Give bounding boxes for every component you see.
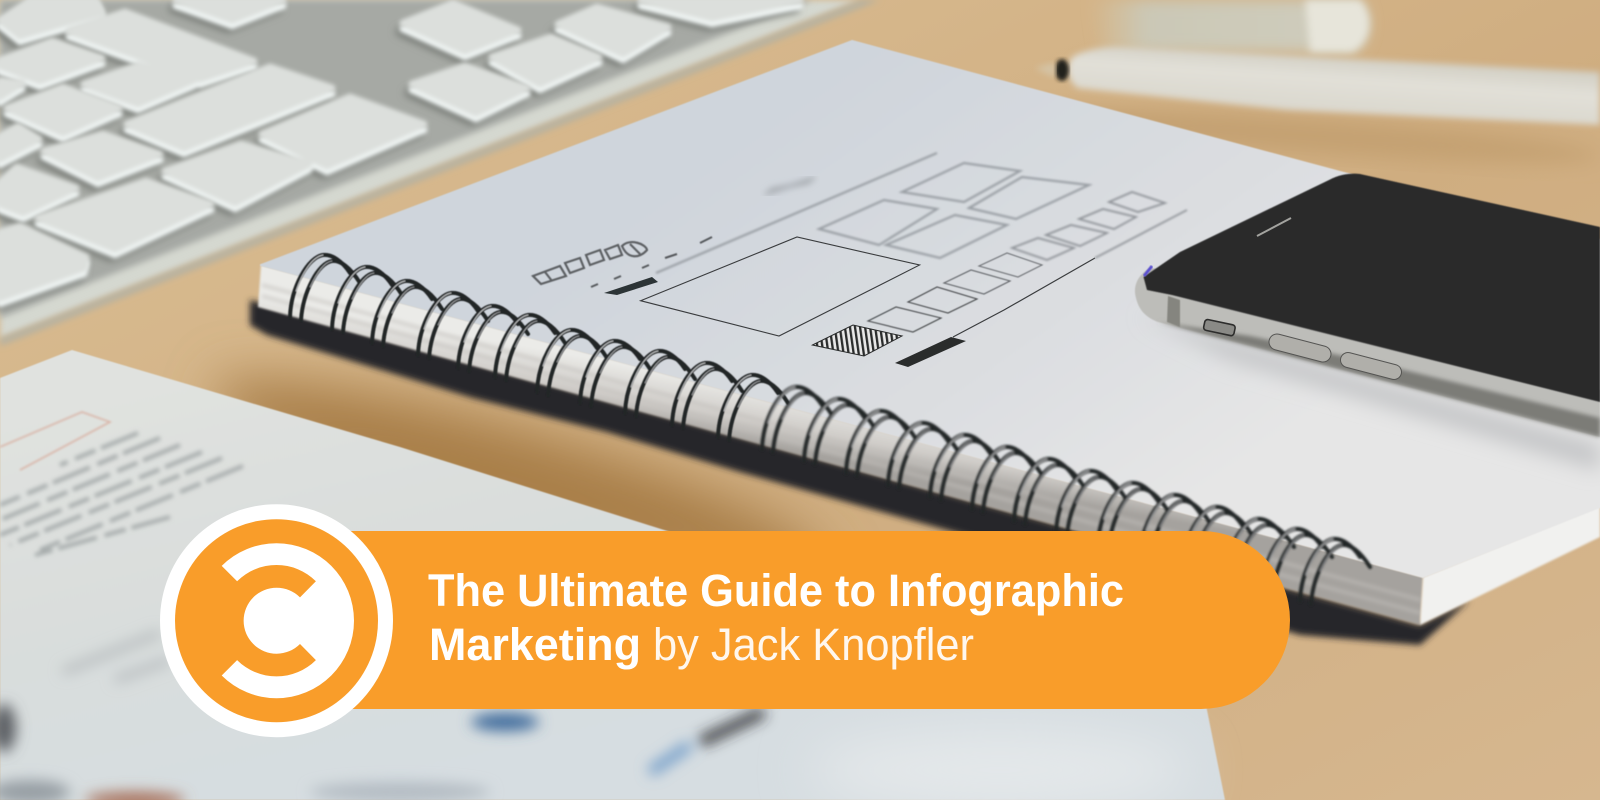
- phone antenna band: [1167, 296, 1180, 327]
- sketch: thumbnail row: [868, 253, 1042, 332]
- phone screen glint: [1144, 266, 1152, 276]
- blurred keyboard: [0, 0, 880, 346]
- notebook top page: [261, 41, 1600, 577]
- byline: by Jack Knopfler: [653, 619, 974, 670]
- title line one: The Ultimate Guide to Infographic: [428, 565, 1124, 616]
- smartphone: [1135, 174, 1600, 470]
- sketch: long baseline: [953, 258, 1095, 337]
- phone screen: [1144, 174, 1600, 402]
- phone metal body: [1135, 268, 1600, 437]
- sketch: hatched image: [812, 325, 902, 356]
- document lower white glow: [810, 730, 1190, 800]
- spiral notebook: [250, 41, 1600, 645]
- phone lower dark edge: [1158, 322, 1600, 437]
- wireframe sketch on page: [533, 153, 1187, 367]
- sketch: upper blurred boxes: [656, 153, 1089, 273]
- sketch: thick black bar: [895, 337, 966, 367]
- phone speaker slit: [1257, 218, 1291, 236]
- notebook right page thickness: [1420, 505, 1600, 625]
- logo orange disc: [175, 519, 378, 722]
- foreground blurred document: [0, 350, 1225, 800]
- page stack fine lines: [262, 285, 1421, 613]
- sketch: blurred label: [765, 178, 815, 194]
- keyboard keys: [0, 0, 800, 307]
- orange title banner: [300, 531, 1290, 709]
- sketch: small dark bar: [604, 277, 658, 295]
- page stack edge: [258, 265, 1423, 625]
- notebook black cover and shadow: [250, 300, 1470, 645]
- blurred white mug and pen: [1035, 0, 1600, 125]
- sketch: small menu dashes: [591, 237, 712, 287]
- document pink outline box: [0, 412, 110, 470]
- title line two bold: Marketing: [429, 619, 641, 670]
- logo white outer ring: [160, 504, 393, 737]
- document lower blurred content: [0, 633, 764, 800]
- banner pill: [300, 531, 1290, 709]
- circular C logo: [160, 504, 393, 737]
- title text: [428, 565, 1124, 670]
- phone mute switch: [1203, 319, 1236, 336]
- document text lines: [0, 433, 243, 555]
- phone shadow on page: [1140, 315, 1600, 470]
- phone volume buttons: [1277, 342, 1394, 372]
- sketch: main rectangle: [641, 237, 920, 336]
- logo C mark: [222, 543, 354, 698]
- sketch: hand-drawn logo scribble: [533, 242, 647, 284]
- spiral binding rings: [290, 255, 1370, 604]
- document sheet: [0, 350, 1225, 800]
